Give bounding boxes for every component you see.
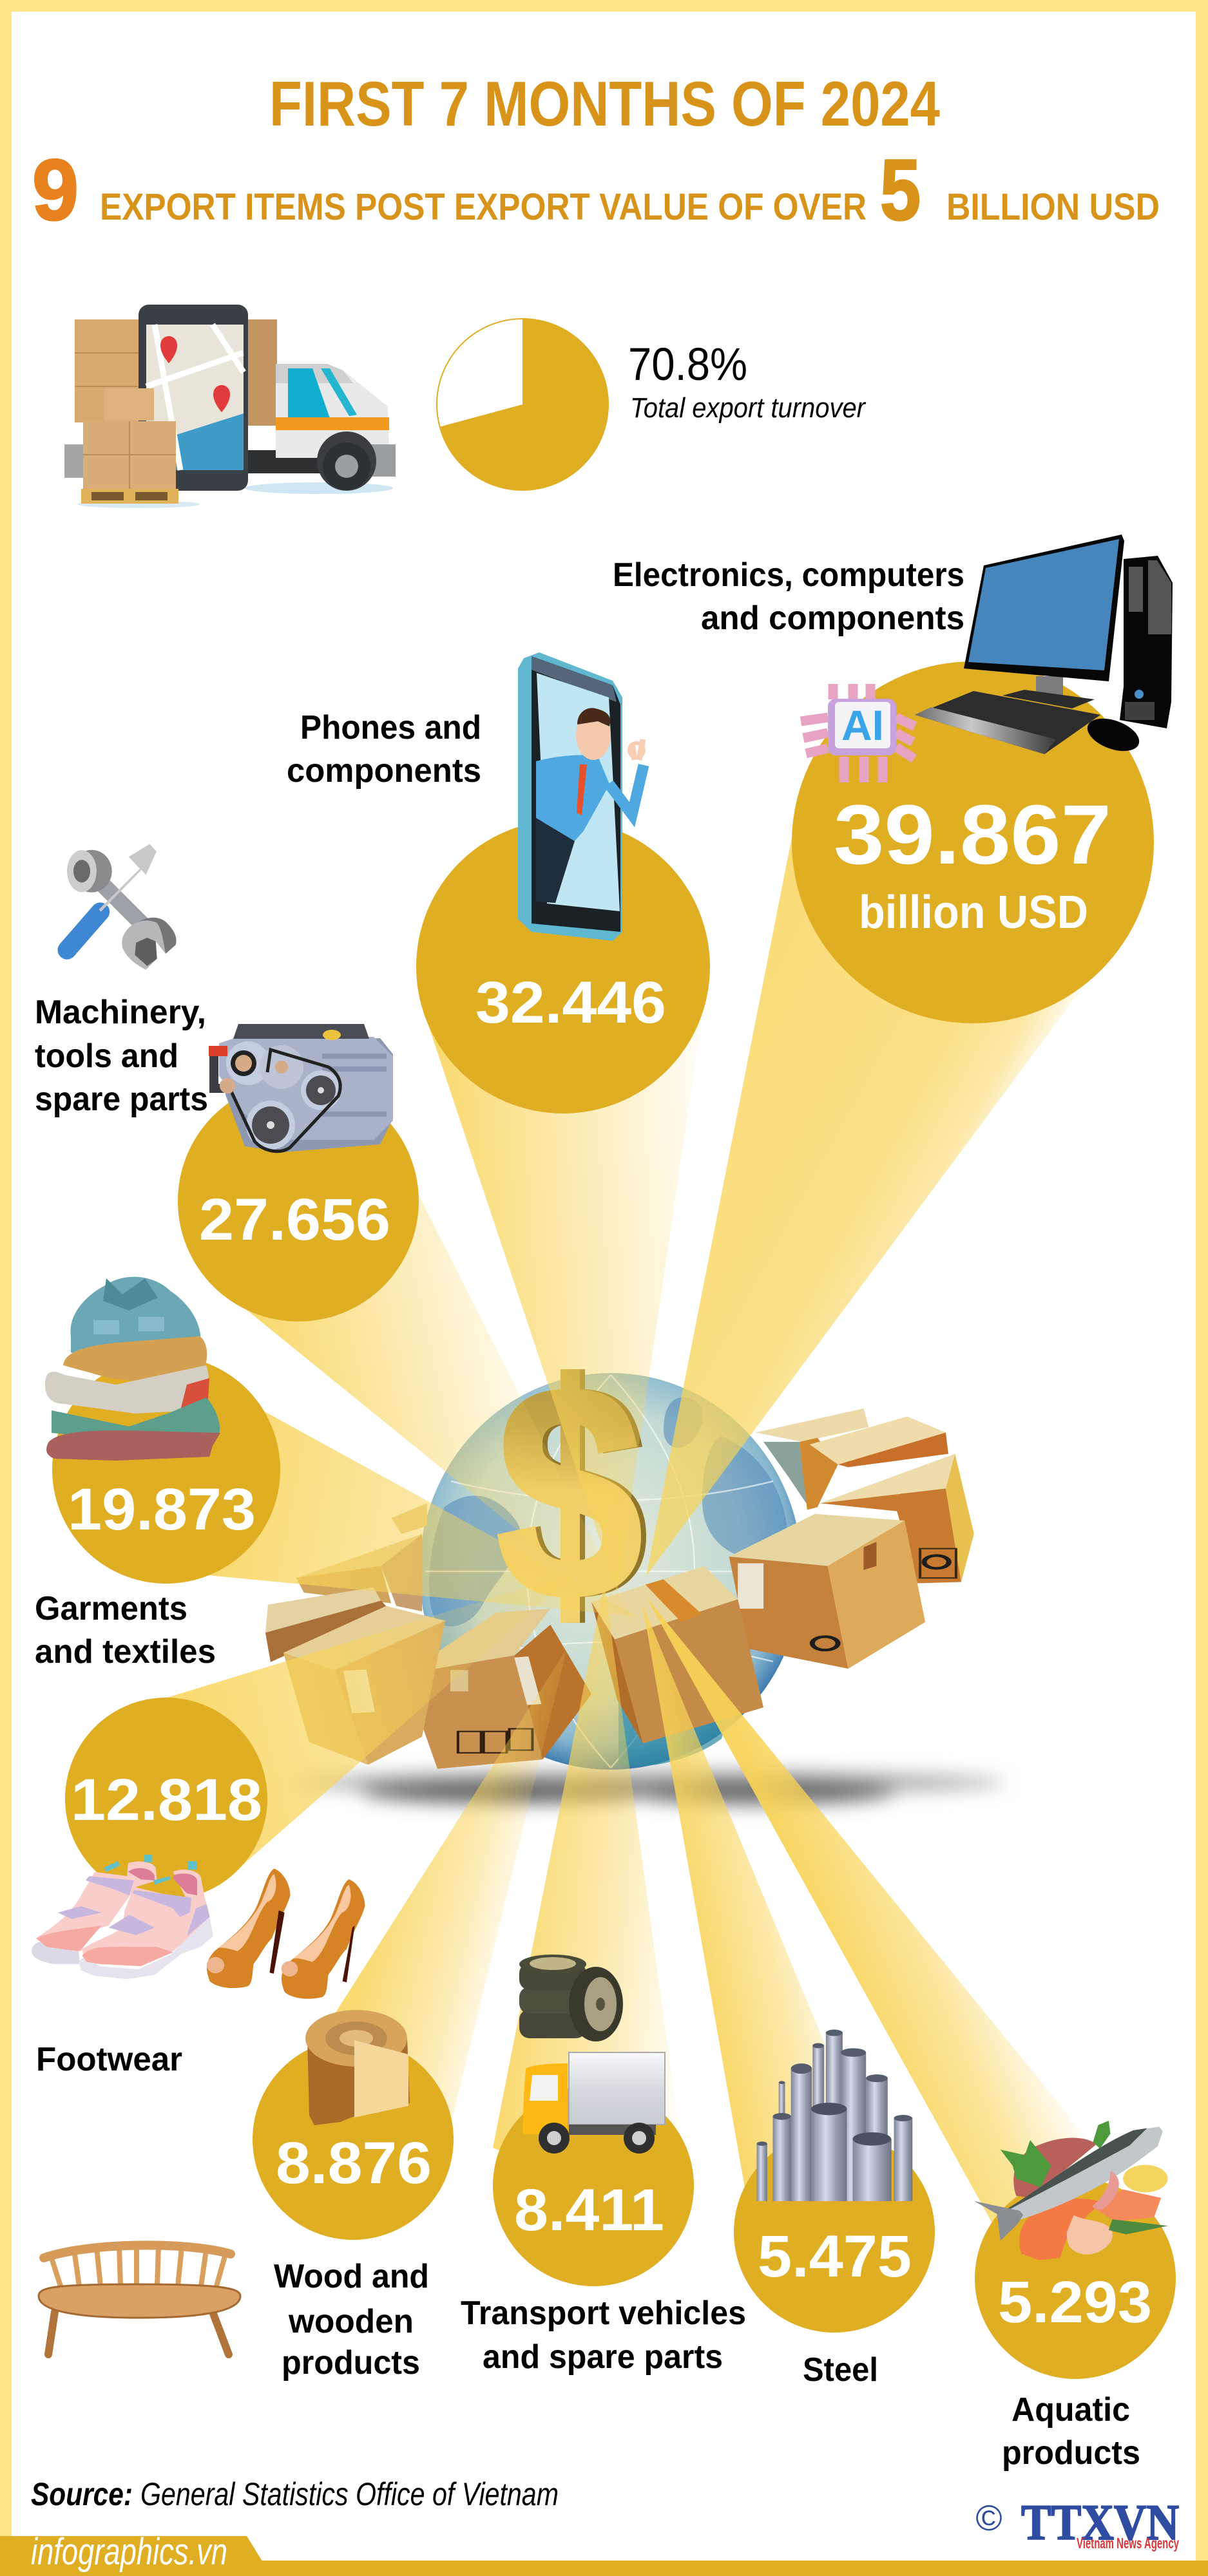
logo: TTXVN: ©	[975, 2497, 1002, 2538]
icon: delivery truck with phone and boxes	[64, 305, 396, 508]
globe shadow	[296, 1770, 1005, 1804]
panel: phones value circle: 32.446	[475, 970, 666, 1036]
logo: TTXVN	[975, 2494, 1179, 2552]
footer bar with site name	[0, 2531, 1208, 2576]
panel: transport value circle: 8.411	[514, 2177, 664, 2243]
icon: desktop computer	[915, 535, 1173, 757]
chart: pie 70.8 percent	[437, 319, 608, 490]
illustration: dollar sign: $	[497, 1323, 642, 1662]
label: transport: and spare parts	[483, 2338, 723, 2376]
label: machinery: Machinery,	[35, 994, 206, 1031]
icon: wooden bench	[39, 2245, 240, 2354]
icon: AI chip: AI	[841, 701, 884, 749]
panel: wood value circle	[253, 2039, 454, 2240]
source note	[31, 2476, 559, 2512]
panel: aquatic value circle: 5.293	[998, 2269, 1152, 2335]
icon: engine	[209, 1024, 393, 1152]
title: FIRST 7 MONTHS OF 2024	[269, 68, 940, 139]
label: transport	[461, 2295, 746, 2376]
label: electronics: Electronics, computers	[613, 556, 964, 594]
icon: tires	[519, 1955, 623, 2041]
panel: garments value circle	[52, 1356, 280, 1584]
source note: General Statistics Office of Vietnam	[140, 2476, 559, 2512]
icon: AI chip	[801, 684, 915, 782]
source note: Source:	[31, 2476, 133, 2512]
label: machinery: tools and	[35, 1037, 178, 1075]
subtitle: BILLION USD	[946, 186, 1160, 228]
label: wood: products	[282, 2344, 420, 2382]
subtitle: 5	[880, 142, 921, 238]
subtitle	[32, 142, 1160, 238]
logo: TTXVN: TTXVN	[1021, 2494, 1179, 2550]
panel: phones value circle	[416, 820, 710, 1113]
label: wood	[274, 2258, 429, 2382]
panel: footwear value circle	[65, 1698, 267, 1900]
illustration: cardboard boxes	[265, 1408, 974, 1769]
panel: steel value circle	[734, 2132, 935, 2333]
illustration: globe	[419, 1373, 802, 1770]
label: garments: Garments	[35, 1590, 187, 1627]
label: aquatic: Aquatic	[1011, 2391, 1130, 2429]
label: steel: Steel	[803, 2351, 878, 2389]
panel: wood value circle: 8.876	[276, 2130, 432, 2196]
label: wood: Wood and	[274, 2258, 429, 2295]
panel: machinery value circle: 27.656	[199, 1187, 390, 1253]
panel: steel value circle: 5.475	[758, 2224, 912, 2289]
label: phones: components	[287, 752, 481, 790]
label: garments: and textiles	[35, 1633, 216, 1671]
panel: footwear value circle: 12.818	[71, 1767, 262, 1833]
label: wood: wooden	[288, 2303, 414, 2340]
pie label: 70.8%	[628, 339, 747, 390]
label: electronics	[613, 556, 964, 637]
label: transport: Transport vehicles	[461, 2295, 746, 2332]
panel: electronics value circle: 39.867	[834, 787, 1111, 882]
icon: steel pipes	[757, 2030, 912, 2201]
illustration: dollar sign: $	[503, 1323, 647, 1662]
footer bar with site name: infographics.vn	[31, 2531, 227, 2573]
label: phones: Phones and	[300, 709, 481, 746]
label: aquatic	[1002, 2391, 1140, 2472]
sun rays	[155, 837, 1108, 2278]
panel: machinery value circle	[178, 1081, 419, 1321]
icon: clothes stack	[45, 1277, 220, 1461]
icon: tree stump	[305, 2010, 410, 2125]
panel: transport value circle	[493, 2085, 694, 2286]
icon: sneakers and high heels	[32, 1855, 365, 1999]
panel: electronics value circle: billion USD	[859, 887, 1088, 938]
pie label: Total export turnover	[630, 392, 867, 424]
panel: aquatic value circle	[975, 2178, 1176, 2379]
label: phones	[287, 709, 481, 790]
icon: wrench and screwdriver	[67, 844, 177, 970]
label: garments	[35, 1590, 216, 1671]
label: machinery	[35, 994, 208, 1118]
panel: electronics value circle	[792, 661, 1154, 1023]
subtitle: 9	[32, 142, 79, 238]
label: footwear: Footwear	[36, 2041, 182, 2078]
label: machinery: spare parts	[35, 1081, 208, 1118]
subtitle: EXPORT ITEMS POST EXPORT VALUE OF OVER	[100, 186, 867, 228]
icon: smartphone with man	[518, 652, 644, 941]
label: electronics: and components	[701, 600, 964, 637]
icon: delivery truck	[523, 2052, 665, 2154]
panel: garments value circle: 19.873	[68, 1477, 256, 1542]
icon: fish and seafood	[974, 2121, 1168, 2260]
pie label	[628, 339, 867, 424]
label: aquatic: products	[1002, 2434, 1140, 2472]
